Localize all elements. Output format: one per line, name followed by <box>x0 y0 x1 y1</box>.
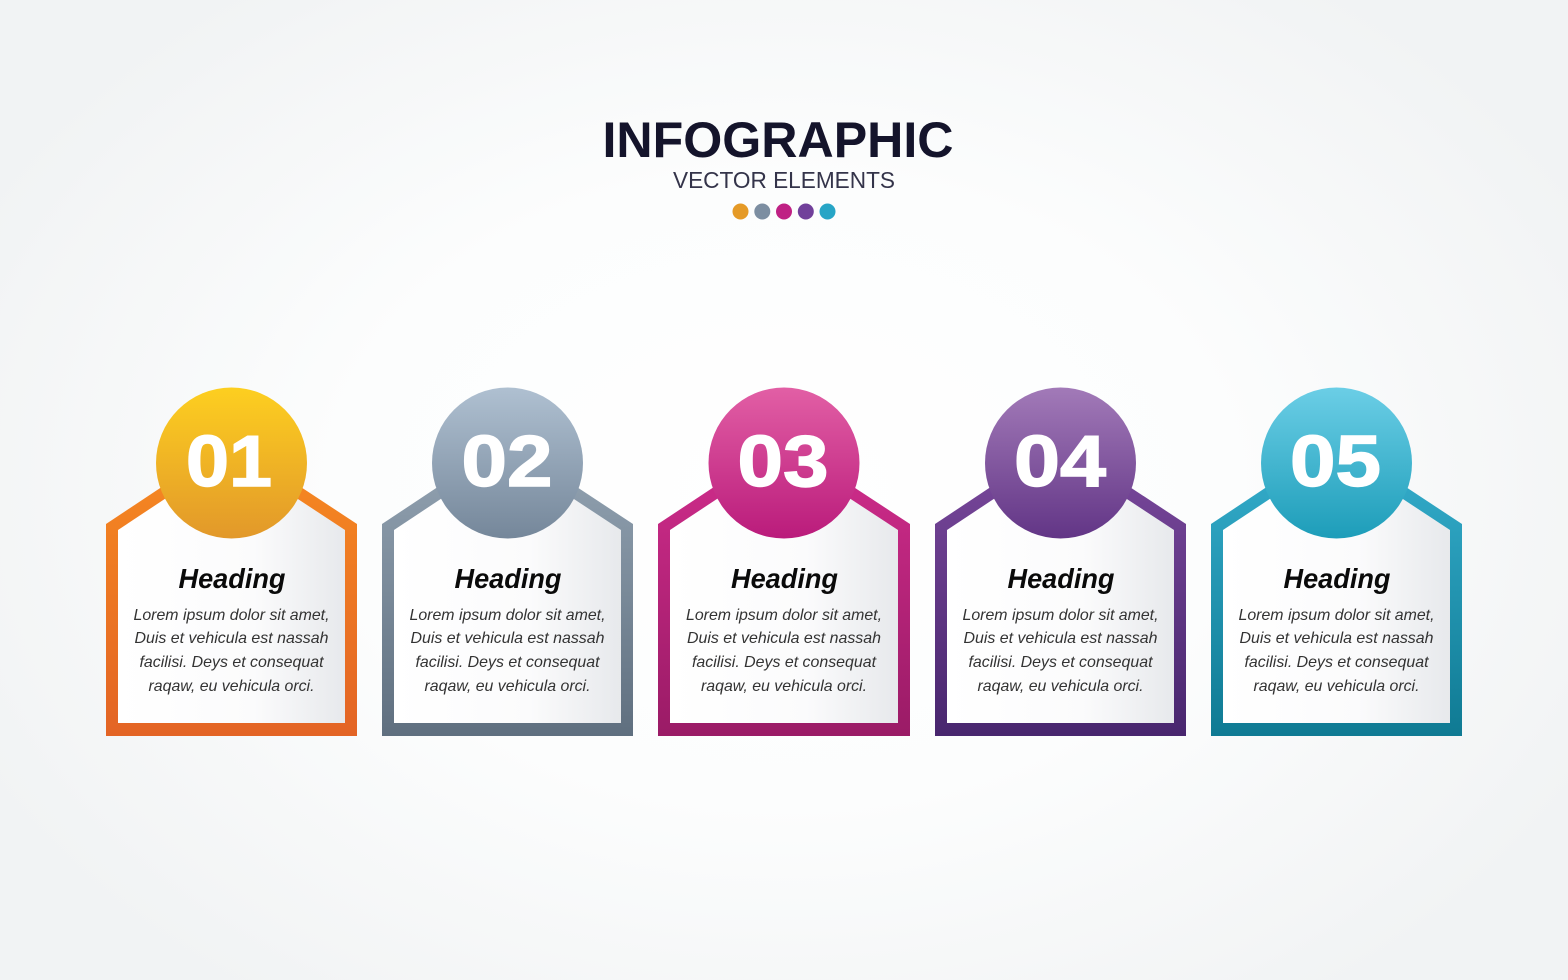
card frame <box>658 441 910 736</box>
body text: raqaw, eu vehicula orci. <box>424 678 590 695</box>
panel: step 02 <box>382 388 633 736</box>
body text <box>410 607 606 695</box>
body text: Lorem ipsum dolor sit amet, <box>686 607 882 624</box>
number: 05 <box>1290 422 1381 502</box>
body text: Lorem ipsum dolor sit amet, <box>134 607 330 624</box>
title: INFOGRAPHIC <box>602 112 954 168</box>
number: 01 <box>186 422 272 502</box>
body text: Lorem ipsum dolor sit amet, <box>1238 607 1434 624</box>
heading: Heading <box>1008 563 1114 594</box>
panel: step 04 <box>935 388 1186 736</box>
body text: Duis et vehicula est nassah <box>134 630 329 647</box>
body text: Lorem ipsum dolor sit amet, <box>410 607 606 624</box>
body text: Lorem ipsum dolor sit amet, <box>962 607 1158 624</box>
card frame <box>1211 441 1462 736</box>
card frame <box>106 441 357 736</box>
number badge <box>708 388 860 538</box>
number badge <box>1261 388 1412 538</box>
card interior <box>394 455 621 723</box>
body text <box>686 607 882 695</box>
heading: Heading <box>731 563 838 594</box>
panel: step 01 <box>106 388 357 736</box>
body text: Duis et vehicula est nassah <box>687 630 881 647</box>
card frame <box>935 441 1186 736</box>
body text: facilisi. Deys et consequat <box>1244 654 1429 671</box>
number badge <box>156 388 307 538</box>
number: 02 <box>462 422 552 502</box>
heading: Heading <box>178 563 286 594</box>
number: 04 <box>1014 422 1106 502</box>
colour dots <box>732 204 836 220</box>
body text: raqaw, eu vehicula orci. <box>1254 678 1420 695</box>
card interior <box>670 455 898 723</box>
body text: Duis et vehicula est nassah <box>964 630 1158 647</box>
body text: facilisi. Deys et consequat <box>416 654 600 671</box>
heading: Heading <box>454 563 562 594</box>
body text: facilisi. Deys et consequat <box>692 654 877 671</box>
card interior <box>118 455 345 723</box>
subtitle: VECTOR ELEMENTS <box>673 167 895 193</box>
body text <box>962 607 1158 695</box>
panel: step 03 <box>658 388 910 736</box>
body text <box>1238 607 1434 695</box>
body text <box>134 607 330 695</box>
number badge <box>432 388 583 538</box>
body text: raqaw, eu vehicula orci. <box>701 678 867 695</box>
number: 03 <box>738 422 828 502</box>
title block <box>602 112 954 220</box>
card interior <box>947 455 1174 723</box>
body text: Duis et vehicula est nassah <box>1240 630 1434 647</box>
panel: step 05 <box>1211 388 1462 736</box>
card interior <box>1223 455 1450 723</box>
body text: facilisi. Deys et consequat <box>140 654 324 671</box>
body text: Duis et vehicula est nassah <box>410 630 605 647</box>
body text: raqaw, eu vehicula orci. <box>978 678 1144 695</box>
card frame <box>382 441 633 736</box>
body text: facilisi. Deys et consequat <box>968 654 1153 671</box>
number badge <box>985 388 1136 538</box>
heading: Heading <box>1284 563 1390 594</box>
body text: raqaw, eu vehicula orci. <box>148 678 314 695</box>
